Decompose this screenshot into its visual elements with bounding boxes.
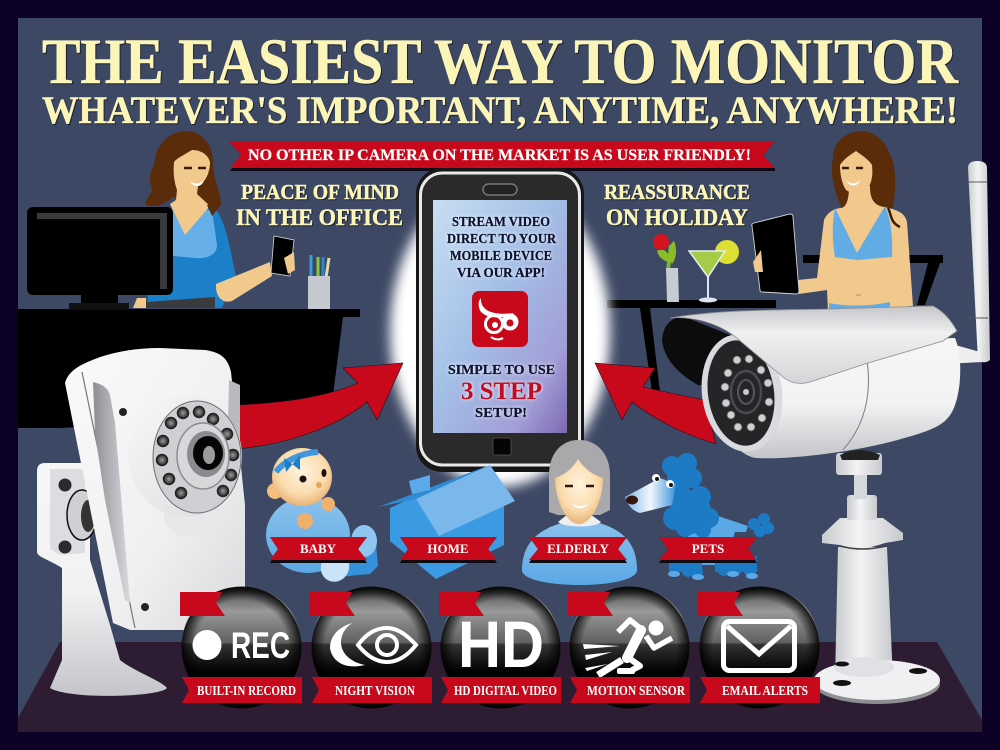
screen [433,200,567,433]
label: reassurance: REASSURANCE [604,180,750,204]
pencil cup [308,255,330,309]
phone in hand [271,236,295,276]
ribbon: BUILT-IN RECORD [197,684,296,699]
label: reassurance [604,180,750,230]
lens face [694,329,790,457]
category: home [378,465,515,579]
screws [119,408,149,611]
ribbon: elderly: ELDERLY [547,541,609,556]
icon: envelope [724,622,794,670]
ribbon: baby: BABY [300,541,337,556]
phone glow [390,177,610,487]
title [42,26,959,132]
screen text bottom: SETUP! [475,406,527,421]
tag [698,592,743,616]
hood interior [662,317,730,386]
sub heading: WHATEVER'S IMPORTANT, ANYTIME, ANYWHERE! [42,89,958,132]
arrow: left camera to phone [236,363,403,449]
antenna [945,161,990,364]
monitor [27,207,173,310]
hood [670,306,957,383]
ribbon: HD DIGITAL VIDEO [454,684,557,699]
side slot [93,382,130,603]
tag [439,592,484,616]
icon: moon and eye [330,623,416,666]
screen text top [447,215,557,281]
top ribbon [229,141,775,171]
screen text bottom: 3 STEP [461,378,542,405]
barrel [721,338,960,458]
flower vase [653,234,679,302]
tag [180,592,225,616]
indoor camera [37,348,245,696]
front table [607,300,776,392]
label: reassurance: ON HOLIDAY [606,205,748,230]
holiday scene [604,131,943,392]
feature: hd digital video [439,586,561,708]
label: peace of mind: IN THE OFFICE [236,205,403,230]
mount [814,450,940,704]
cocktail [689,240,739,302]
ribbon: home: HOME [427,541,469,556]
table surface [18,642,982,732]
ribbon: pets: PETS [692,541,724,556]
ribbon: pets [659,537,757,563]
woman on holiday [798,131,913,312]
screen text top: STREAM VIDEO [452,215,550,230]
screen text top: MOBILE DEVICE [450,249,552,264]
tablet [752,214,799,294]
office scene [18,131,403,428]
back table [803,255,943,305]
ribbon: NIGHT VISION [335,684,415,699]
ribbon: EMAIL ALERTS [722,684,808,699]
tag [310,592,355,616]
app icon [472,291,528,347]
category: baby [266,448,378,587]
label: peace of mind: PEACE OF MIND [241,180,399,204]
category: pets [625,453,774,580]
speaker [483,184,517,195]
lens housing [128,395,242,537]
feature: email alerts [698,586,820,708]
desk [18,309,360,428]
label: peace of mind [236,180,403,230]
top ribbon: NO OTHER IP CAMERA ON THE MARKET IS AS USER FRIENDLY! [248,147,751,164]
home button [493,438,511,455]
category: elderly [522,440,637,585]
icon: rec: REC [231,625,290,666]
woman at office [133,131,272,308]
arrow: right camera to phone [595,363,716,444]
smartphone [416,168,584,472]
screen text top: VIA OUR APP! [457,266,545,281]
ribbon: MOTION SENSOR [587,684,686,699]
screen text bottom: SIMPLE TO USE [448,363,555,378]
feature: built-in record [180,586,302,708]
feature: night vision [310,586,432,708]
outdoor camera [662,161,990,704]
screen text bottom [448,363,555,421]
icon: runner [583,620,672,675]
feature: motion sensor [568,586,690,708]
screen text top: DIRECT TO YOUR [447,232,557,247]
housing [65,348,245,630]
icon: hd: HD [458,607,544,681]
bracket [37,463,167,696]
ribbon: elderly [529,537,627,563]
tag [568,592,613,616]
